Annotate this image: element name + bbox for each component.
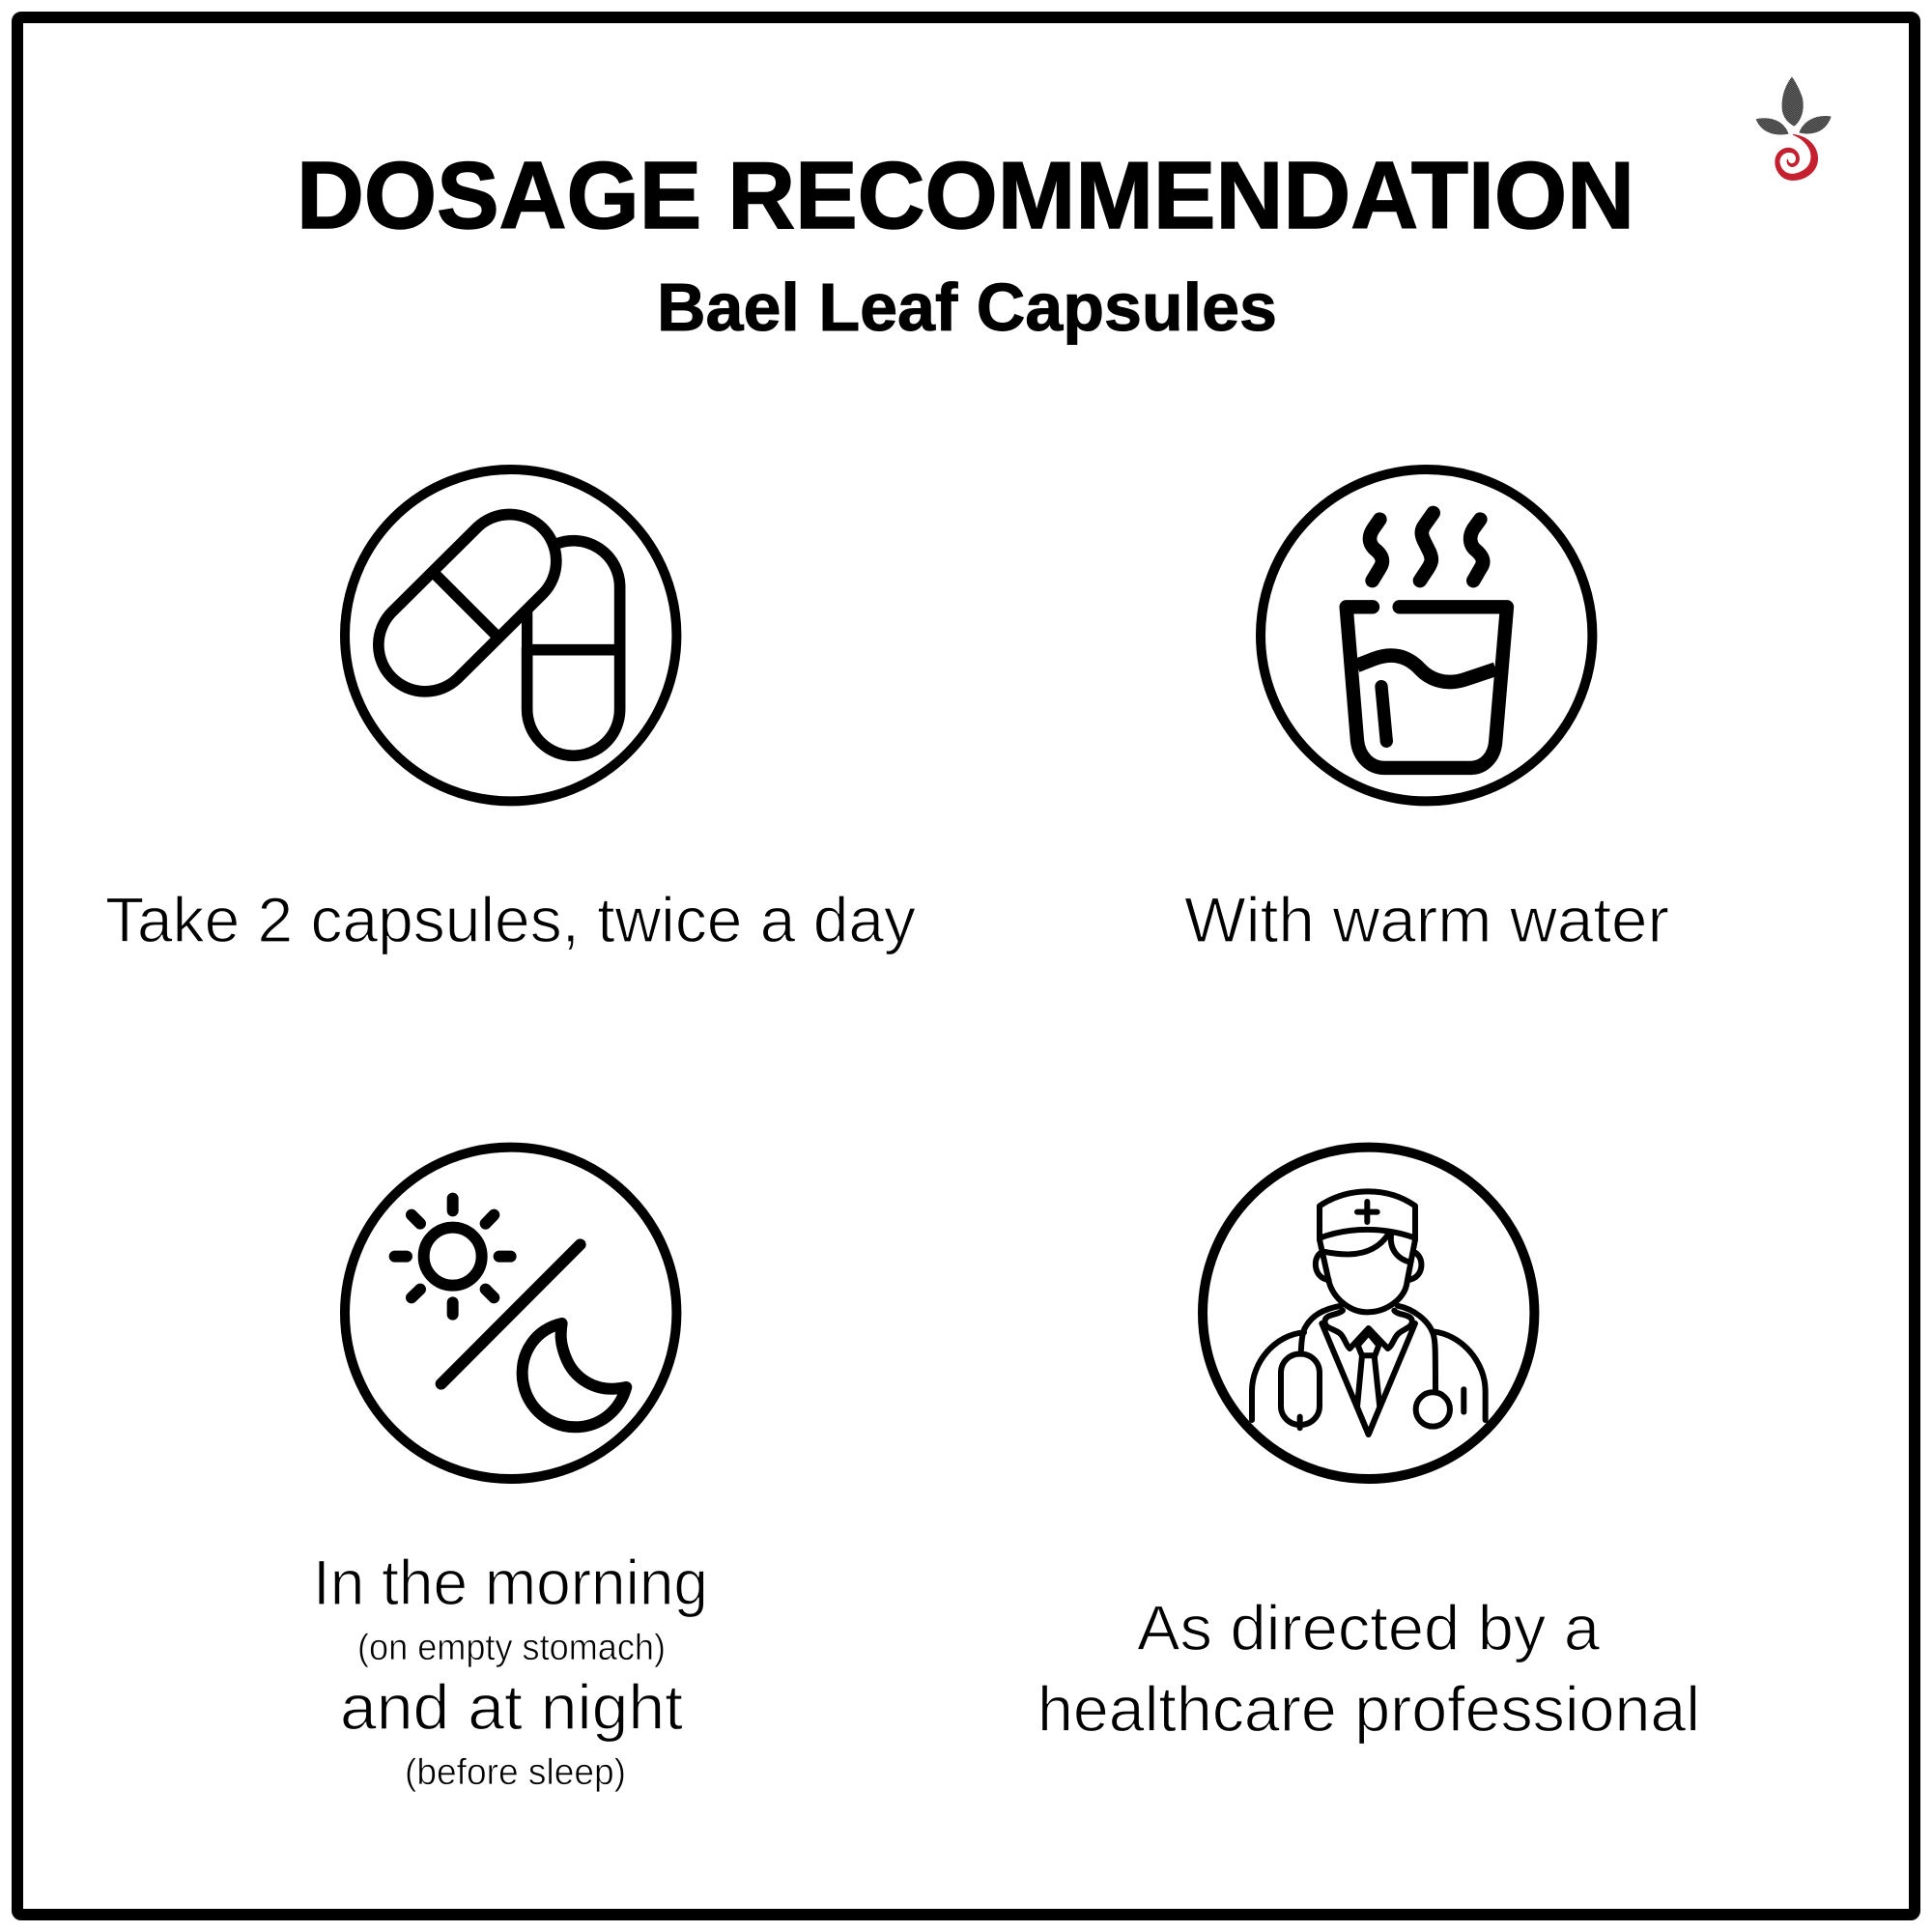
icon: doctor bbox=[1203, 1148, 1534, 1479]
icon: capsules bbox=[345, 469, 676, 801]
label: healthcare professional: healthcare professional bbox=[1037, 1673, 1700, 1745]
subtitle: Bael Leaf Capsules bbox=[657, 270, 1277, 345]
panel: timing bbox=[313, 1148, 708, 1793]
icon: steaming glass of water bbox=[1261, 469, 1592, 801]
title: DOSAGE RECOMMENDATION bbox=[297, 142, 1634, 248]
label: as directed by a: As directed by a bbox=[1137, 1592, 1600, 1663]
icon: sun and moon bbox=[345, 1148, 676, 1479]
panel: warm water bbox=[1184, 469, 1669, 955]
label: before sleep: (before sleep) bbox=[405, 1752, 626, 1793]
panel: healthcare professional bbox=[1037, 1148, 1700, 1745]
label: on empty stomach: (on empty stomach) bbox=[357, 1628, 666, 1668]
label: and at night: and at night bbox=[340, 1671, 683, 1743]
label: in the morning: In the morning bbox=[313, 1547, 708, 1618]
label: with warm water: With warm water bbox=[1184, 884, 1669, 955]
logo: leaves and spiral bbox=[1756, 76, 1832, 180]
label: take 2 capsules: Take 2 capsules, twice a day bbox=[105, 884, 916, 955]
panel: capsules bbox=[105, 469, 916, 955]
